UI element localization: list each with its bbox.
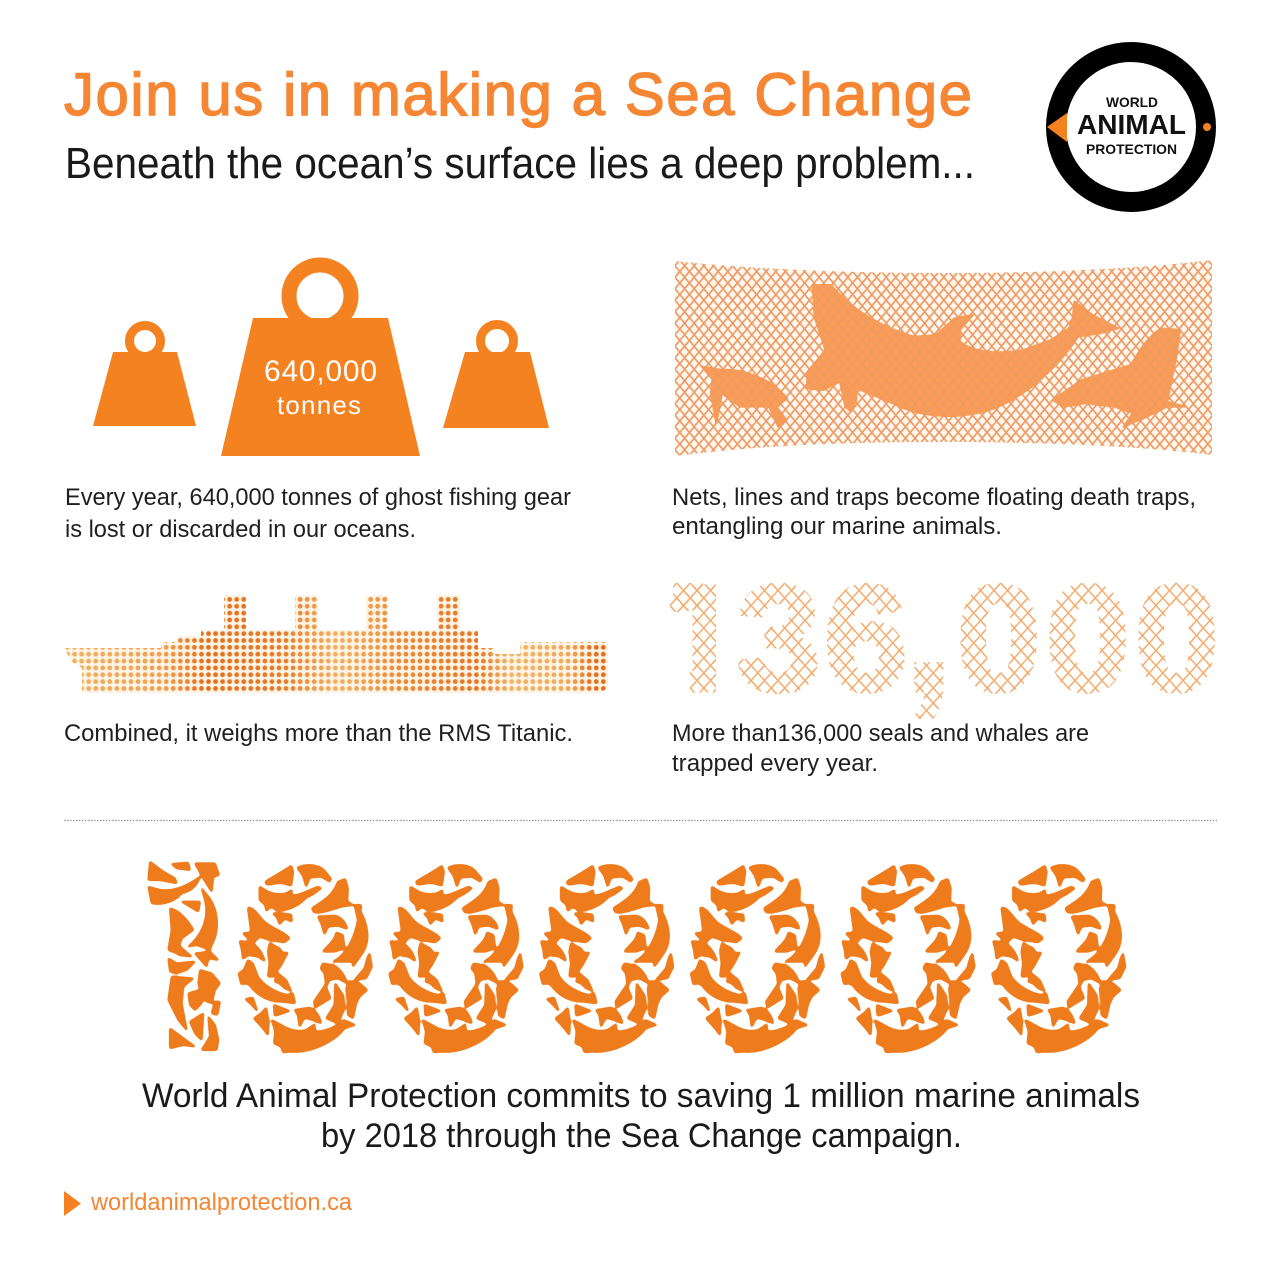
digit one — [148, 862, 220, 1050]
caption: nets — [672, 484, 1196, 540]
logo wordmark: animal: ANIMAL — [1077, 109, 1186, 140]
number: 136,000 in net pattern: 0 — [1046, 554, 1129, 722]
icon: orange arrow — [64, 1191, 81, 1216]
digit zero 2 — [389, 865, 523, 1052]
digit zero 6 — [992, 865, 1125, 1052]
icon: small right weight — [443, 324, 549, 428]
number: 136,000 in net pattern: , — [905, 537, 952, 727]
caption: nets: entangling our marine animals. — [672, 513, 1002, 540]
number: 1000000 made of marine animals — [148, 862, 1125, 1052]
number: 136,000 in net pattern: 1 — [660, 554, 743, 722]
icon: logo orange dot — [1203, 123, 1211, 131]
illustration: net with marine animals — [670, 255, 1218, 460]
caption: ghost gear: is lost or discarded in our oceans. — [65, 516, 416, 543]
icon: large centre weight — [221, 265, 420, 456]
logo wordmark: world: WORLD — [1106, 94, 1158, 110]
caption: ghost gear: Every year, 640,000 tonnes of ghost fishing gear — [65, 484, 571, 511]
number: 136,000 in net pattern: 6 — [824, 554, 907, 722]
digit zero 1 — [239, 865, 372, 1052]
icon: small left weight — [93, 326, 196, 426]
net mesh — [670, 255, 1218, 460]
website link: worldanimalprotection.ca — [90, 1189, 353, 1216]
commitment statement: World Animal Protection commits to saving 1 million marine animals — [142, 1077, 1140, 1115]
title: Join us in making a Sea Change — [64, 61, 972, 128]
caption: ghost gear — [65, 484, 571, 543]
number: 136,000 in net pattern: 0 — [957, 554, 1040, 722]
commitment statement: by 2018 through the Sea Change campaign. — [321, 1117, 962, 1155]
number: 136,000 in net pattern: 3 — [737, 554, 820, 722]
icon: weights — [93, 265, 549, 456]
icon: logo orange arrow — [1047, 113, 1067, 142]
digit zero 3 — [540, 865, 673, 1052]
caption: seals and whales — [672, 720, 1089, 777]
commitment statement — [142, 1077, 1140, 1155]
caption: nets: Nets, lines and traps become floating death traps, — [672, 484, 1196, 511]
digit zero 4 — [691, 865, 824, 1052]
number: 136,000 in net pattern — [670, 582, 1215, 719]
caption: Titanic: Combined, it weighs more than the RMS Titanic. — [64, 720, 573, 747]
subtitle: Beneath the ocean’s surface lies a deep problem... — [65, 139, 975, 188]
weight label: tonnes: tonnes — [277, 390, 361, 420]
weight label: 640,000: 640,000 — [264, 355, 377, 388]
caption: seals and whales: trapped every year. — [672, 750, 878, 777]
logo wordmark: protection: PROTECTION — [1086, 141, 1177, 157]
digit zero 5 — [841, 865, 975, 1052]
caption: seals and whales: More than136,000 seals and whales are — [672, 720, 1089, 747]
icon: whale, turtle and seal silhouettes — [702, 285, 1185, 427]
logo: World Animal Protection — [1047, 52, 1211, 202]
illustration: dotted Titanic ship — [64, 595, 608, 693]
number: 136,000 in net pattern: 0 — [1135, 554, 1218, 722]
